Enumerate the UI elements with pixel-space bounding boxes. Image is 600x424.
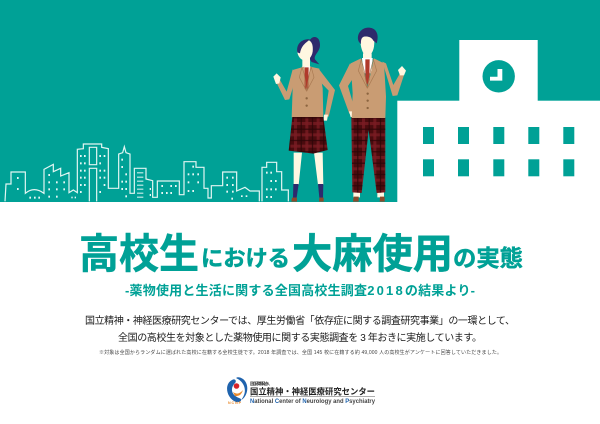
logo mark: NCNP <box>228 401 242 405</box>
body text <box>85 314 515 344</box>
logo text <box>250 380 375 405</box>
clock <box>482 60 515 92</box>
footnote: ※対象は全国からランダムに選ばれた高校に在籍する全校生徒です。2018 年調査では、全国 145 校に在籍する約 49,000 人の高校生がアンケートに回答していただきました。 <box>99 349 502 356</box>
logo text: 国立研究開発法人 <box>250 380 270 386</box>
logo: National Center of Neurology and Psychiatry <box>227 377 375 405</box>
girl student <box>273 37 335 202</box>
title: 大麻使用 <box>292 231 453 277</box>
windows <box>423 127 574 176</box>
title <box>79 231 523 277</box>
title: 高校生 <box>79 231 199 277</box>
logo mark <box>227 377 247 405</box>
teal header background <box>0 0 600 202</box>
title: における <box>201 246 290 271</box>
subtitle: -薬物使用と生活に関する全国高校生調査2018の結果より- <box>125 283 475 298</box>
boy student <box>339 28 406 202</box>
city skyline <box>5 144 288 201</box>
title: の実態 <box>453 245 523 271</box>
student figures <box>273 28 406 202</box>
body text: 全国の高校生を対象とした薬物使用に関する実態調査を 3 年おきに実施しています。 <box>118 331 482 344</box>
school building <box>397 40 600 203</box>
logo text: National Center of Neurology and Psychiatry <box>250 398 375 405</box>
body text: 国立精神・神経医療研究センターでは、厚生労働省「依存症に関する調査研究事業」の一環として、 <box>85 314 515 327</box>
logo text: 国立精神・神経医療研究センター <box>250 386 375 396</box>
